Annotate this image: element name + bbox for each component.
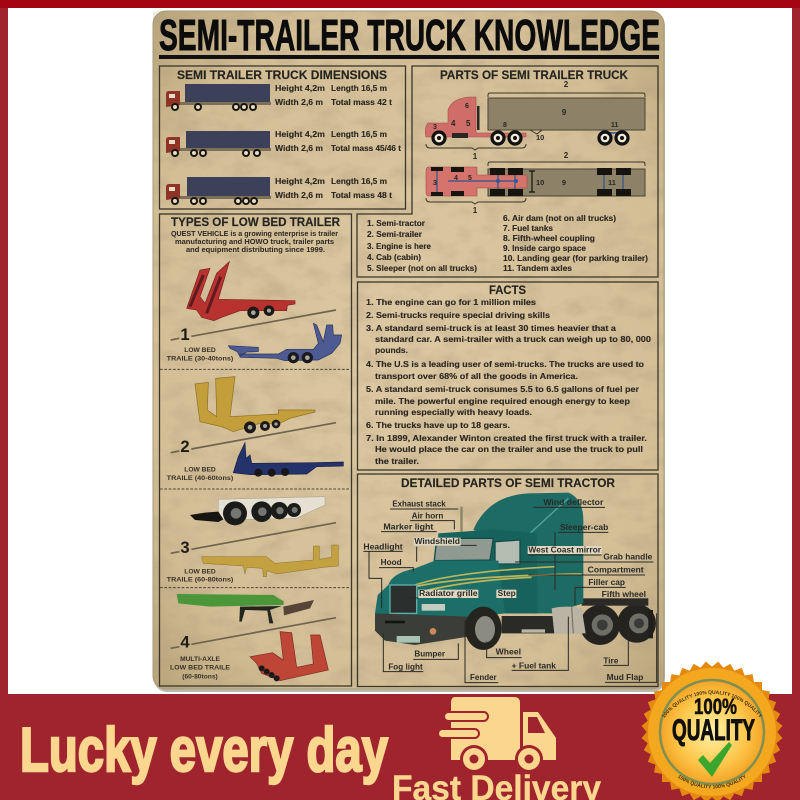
facts list: 6. The trucks have up to 18 gears. [366, 420, 510, 430]
truck 1 specs: Total mass 42 t [331, 98, 392, 107]
trailer 3 yellow [202, 545, 338, 577]
trailer 3 white [190, 497, 325, 525]
truck 2 specs [275, 130, 401, 153]
icon: quality seal: QUALITY [672, 714, 755, 747]
trailer 4 green [177, 594, 314, 623]
truck 3 [166, 177, 271, 204]
callouts: Air horn [412, 511, 443, 520]
dashed divider 1 [160, 368, 350, 371]
callouts: Wind deflector [543, 498, 603, 507]
side view diagram: 5 [466, 119, 471, 128]
top view diagram: 11 [608, 178, 616, 187]
truck 3 specs: Height 4,2m [275, 177, 325, 186]
sections 2 to 4 lower trailers [160, 443, 350, 681]
truck 3 specs: Width 2,6 m [275, 191, 323, 200]
banner slogan: Lucky every day [20, 716, 388, 785]
parts list left: 5. Sleeper (not on all trucks) [367, 263, 477, 273]
section 1 and 2 trailers [160, 262, 350, 456]
heading: low bed: TYPES OF LOW BED TRAILER [171, 215, 340, 229]
truck 2 [166, 131, 271, 156]
callouts: Radiator grille [419, 589, 478, 598]
panel: types of low bed trailer [160, 214, 352, 686]
facts list: standard car. A semi-trailer with a truck can weigh up to 80, 000 [375, 334, 651, 344]
callouts [363, 498, 657, 683]
divider line 2 [171, 423, 336, 453]
number 3: 3 [180, 538, 190, 557]
side view diagram: 1 [473, 152, 478, 161]
callouts: Windshield [414, 537, 460, 546]
parts list right: 8. Fifth-wheel coupling [503, 233, 595, 243]
truck 2 specs: Total mass 45/46 t [331, 144, 401, 153]
side view diagram [425, 80, 645, 161]
callouts: Hood [381, 558, 402, 567]
label 2 [167, 467, 233, 482]
truck 2 specs: Height 4,2m [275, 130, 325, 139]
parts list left: 1. Semi-tractor [367, 218, 426, 228]
heading: facts: FACTS [489, 283, 526, 297]
parts list right: 9. Inside cargo space [503, 243, 586, 253]
callouts: Bumper [414, 650, 445, 659]
truck 1 specs: Width 2,6 m [275, 98, 323, 107]
dashed divider 2 [160, 487, 350, 490]
top view diagram: 1 [473, 206, 478, 215]
top view diagram [426, 151, 645, 215]
facts list: transport over 68% of all the goods in America. [375, 371, 578, 381]
label 2: LOW BED [184, 467, 216, 474]
truck 1 specs [275, 84, 392, 107]
label 1 [167, 347, 233, 363]
label 2: TRAILE (40-60tons) [167, 475, 233, 482]
truck 2 specs: Length 16,5 m [331, 130, 387, 139]
facts list: 1. The engine can go for 1 million miles [366, 297, 536, 307]
label 4 [170, 656, 231, 680]
top view diagram: 3 [433, 180, 437, 187]
truck 1 specs: Height 4,2m [275, 84, 325, 93]
facts list: running especially with heavy loads. [375, 407, 532, 417]
label 1: LOW BED [184, 347, 216, 354]
facts list: the trailer. [375, 456, 419, 466]
heading: detailed parts: DETAILED PARTS OF SEMI TRACTOR [401, 476, 615, 490]
callouts: Fog light [388, 662, 423, 671]
facts list: 3. A standard semi-truck is at least 30 times heavier that a [366, 323, 616, 333]
parts list right: 6. Air dam (not on all trucks) [503, 213, 616, 223]
number 1: 1 [180, 325, 190, 344]
parts list right: 11. Tandem axles [503, 263, 572, 273]
heading: dimensions: SEMI TRAILER TRUCK DIMENSIONS [177, 68, 387, 82]
side view diagram: 11 [611, 122, 619, 129]
callouts: Step [498, 589, 516, 598]
trailer 2 navy [233, 443, 343, 477]
label 1: TRAILE (30-40tons) [167, 356, 233, 363]
callouts: + Fuel tank [512, 661, 557, 670]
trailer 2 yellow [195, 377, 315, 433]
callouts: Fifth wheel [602, 590, 646, 599]
facts list: mile. The powerful engine required enough energy to keep [375, 396, 630, 406]
divider line 1 [171, 310, 336, 340]
label 3: LOW BED [184, 568, 216, 575]
label 3: TRAILE (60-80tons) [167, 577, 233, 584]
divider line 4 [171, 618, 336, 648]
parts list left: 3. Engine is here [367, 241, 431, 251]
facts list: He would place the car on the trailer and use the truck to pull [375, 444, 643, 454]
facts list: pounds. [375, 345, 408, 355]
callouts: Marker light [383, 522, 434, 531]
parts list left [367, 218, 477, 273]
parts list left: 2. Semi-trailer [367, 229, 423, 239]
intro text: manufacturing and HOWO truck, trailer parts [175, 237, 334, 246]
callouts: Sleeper-cab [560, 523, 608, 532]
parts list right [503, 213, 648, 273]
dashed divider 3 [160, 586, 350, 589]
number 4: 4 [180, 632, 190, 651]
truck 1 specs: Length 16,5 m [331, 84, 387, 93]
label 4: (60-80tons) [182, 673, 218, 680]
facts list: 2. Semi-trucks require special driving skills [366, 310, 550, 320]
truck 3 specs: Total mass 48 t [331, 191, 392, 200]
intro text [171, 229, 338, 254]
side view diagram: 3 [433, 124, 437, 131]
panel: semi trailer truck dimensions [160, 66, 406, 209]
side view diagram: 6 [465, 103, 469, 110]
poster card [153, 11, 665, 692]
truck 2 specs: Width 2,6 m [275, 144, 323, 153]
side view diagram: 10 [536, 133, 544, 142]
truck illustration [375, 493, 656, 650]
top view diagram: 10 [536, 178, 544, 187]
top view diagram: 5 [468, 175, 472, 182]
callouts: West Coast mirror [528, 545, 601, 554]
side view diagram: 4 [451, 119, 456, 128]
callouts: Fender [470, 673, 497, 682]
callouts: Filler cap [588, 578, 625, 587]
trailer 4 red [250, 632, 328, 681]
top view diagram: 9 [562, 178, 566, 187]
facts list: 7. In 1899, Alexander Winton created the first truck with a trailer. [366, 433, 647, 443]
callouts: Wheel [496, 647, 521, 656]
facts list: 4. The U.S is a leading user of semi-trucks. The trucks are used to [366, 359, 644, 369]
heading: parts: PARTS OF SEMI TRAILER TRUCK [440, 68, 628, 82]
side view diagram: 9 [562, 108, 567, 117]
panel: facts [358, 282, 658, 470]
panel: parts of semi trailer truck [357, 66, 658, 277]
callouts: Grab handle [603, 553, 653, 562]
label 4: LOW BED TRAILE [170, 665, 231, 672]
truck 3 specs [275, 177, 392, 200]
truck 3 specs: Length 16,5 m [331, 177, 387, 186]
callouts: Tire [603, 656, 619, 665]
icon: quality seal: 100% [694, 694, 737, 719]
intro text: and equipment distributing since 1999. [186, 245, 325, 254]
icon: quality seal: 100% QUALITY 100% QUALITY [678, 774, 746, 788]
facts list [366, 297, 651, 466]
panel: detailed parts of semi tractor [358, 474, 658, 686]
truck 1 [166, 84, 271, 110]
trailer 1 blue [228, 323, 342, 363]
top view diagram: 2 [564, 151, 569, 160]
callouts: Compartment [588, 566, 644, 575]
number 2: 2 [180, 437, 190, 456]
callouts: Mud Flap [607, 673, 643, 682]
trailer 1 red [187, 262, 295, 321]
side view diagram: 2 [564, 80, 569, 89]
icon: delivery truck [438, 697, 556, 773]
label 3 [167, 568, 233, 584]
callouts: Exhaust stack [392, 500, 446, 509]
side view diagram: 8 [503, 122, 507, 129]
label 4: MULTI-AXLE [180, 656, 220, 663]
parts list left: 4. Cab (cabin) [367, 252, 421, 262]
icon: quality seal: 100% QUALITY 100% QUALITY 100% QUALITY [662, 690, 762, 718]
icon: quality seal [642, 662, 782, 800]
intro text: QUEST VEHICLE is a growing enterprise is trailer [171, 229, 338, 238]
divider line 3 [171, 523, 336, 553]
parts list right: 10. Landing gear (for parking trailer) [503, 253, 648, 263]
facts list: 5. A standard semi-truck consumes 5.5 to 6.5 gallons of fuel per [366, 384, 640, 394]
top view diagram: 4 [454, 175, 458, 182]
callouts: Headlight [363, 542, 403, 551]
parts list right: 7. Fuel tanks [503, 223, 553, 233]
